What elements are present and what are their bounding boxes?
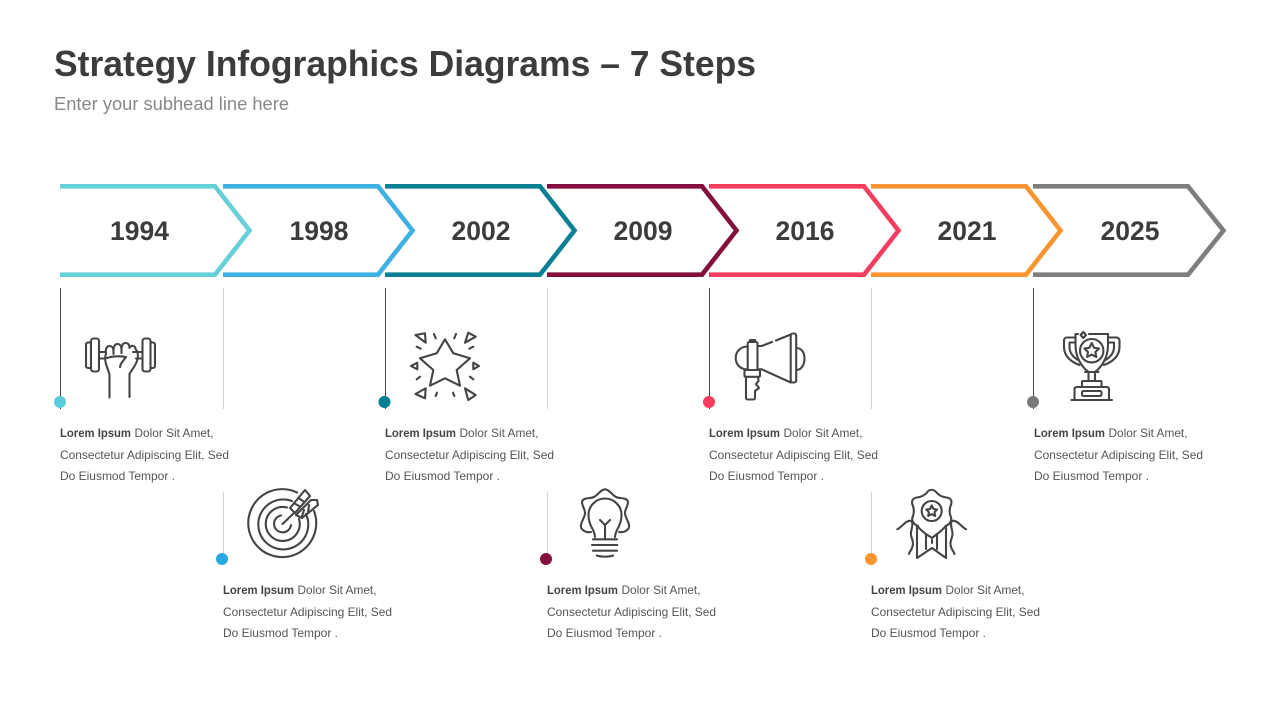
text block: step 3	[385, 426, 554, 483]
icon: trophy	[1064, 332, 1120, 400]
step 4 connector and dot	[540, 288, 552, 565]
icon: light bulb in gear	[581, 489, 629, 557]
text block: step 2: Dolor Sit Amet,	[298, 583, 376, 597]
arrow: 2021	[871, 186, 1060, 275]
arrow: 2016: 2016	[776, 216, 834, 246]
arrow: 1994: 1994	[110, 216, 169, 246]
arrow: 1998: 1998	[290, 216, 348, 246]
arrow: 2025: 2025	[1101, 216, 1159, 246]
step 3 connector and dot	[378, 288, 390, 409]
text block: step 7	[1034, 426, 1203, 483]
icon: megaphone	[736, 334, 804, 400]
text block: step 2	[223, 583, 392, 640]
text block: step 6: Lorem Ipsum	[871, 583, 942, 597]
arrow: 2002	[385, 186, 574, 275]
text block: step 1: Consectetur Adipiscing Elit, Sed	[60, 448, 229, 462]
step 7 connector and dot	[1027, 288, 1039, 409]
text block: step 4: Lorem Ipsum	[547, 583, 618, 597]
text block: step 7: Dolor Sit Amet,	[1108, 426, 1188, 440]
text block: step 6: Dolor Sit Amet,	[946, 583, 1024, 597]
text block: step 1	[60, 426, 229, 483]
text block: step 4: Consectetur Adipiscing Elit, Sed	[547, 605, 716, 619]
title: Strategy Infographics Diagrams – 7 Steps	[54, 43, 756, 84]
text block: step 3: Lorem Ipsum	[385, 426, 456, 440]
text block: step 1: Lorem Ipsum	[60, 426, 131, 440]
text block: step 3: Consectetur Adipiscing Elit, Sed	[385, 448, 554, 462]
step 1 connector and dot	[54, 288, 66, 409]
text block: step 4: Do Eiusmod Tempor .	[547, 626, 662, 640]
icon: dumbbell and fist	[86, 338, 155, 398]
arrow: 2021: 2021	[938, 216, 996, 246]
arrow: 1994	[60, 186, 250, 275]
text block: step 4	[547, 583, 716, 640]
subtitle: Enter your subhead line here	[54, 94, 289, 114]
text block: step 2: Lorem Ipsum	[223, 583, 294, 597]
text block: step 5: Consectetur Adipiscing Elit, Sed	[709, 448, 878, 462]
icon: ribbon badge	[897, 490, 966, 558]
text block: step 5: Dolor Sit Amet,	[784, 426, 862, 440]
arrow: 2009	[547, 186, 736, 275]
step 2 connector and dot	[216, 288, 228, 565]
text block: step 7: Lorem Ipsum	[1034, 426, 1105, 440]
text block: step 1: Dolor Sit Amet,	[134, 426, 214, 440]
text block: step 6: Consectetur Adipiscing Elit, Sed	[871, 605, 1040, 619]
arrow: 2016	[709, 186, 898, 275]
step 6 connector and dot	[865, 288, 877, 565]
text block: step 5	[709, 426, 878, 483]
text block: step 5: Do Eiusmod Tempor .	[709, 469, 824, 483]
text block: step 7: Consectetur Adipiscing Elit, Sed	[1034, 448, 1203, 462]
icon: target with arrow	[248, 489, 318, 557]
arrow: 1998	[223, 186, 412, 275]
text block: step 6	[871, 583, 1040, 640]
step 5 connector and dot	[703, 288, 715, 409]
text block: step 7: Do Eiusmod Tempor .	[1034, 469, 1149, 483]
text block: step 1: Do Eiusmod Tempor .	[60, 469, 175, 483]
arrow: 2025	[1033, 186, 1224, 275]
icon: star burst	[411, 333, 479, 400]
arrow: 2009: 2009	[614, 216, 672, 246]
text block: step 3: Do Eiusmod Tempor .	[385, 469, 500, 483]
text block: step 5: Lorem Ipsum	[709, 426, 780, 440]
text block: step 6: Do Eiusmod Tempor .	[871, 626, 986, 640]
text block: step 4: Dolor Sit Amet,	[622, 583, 700, 597]
text block: step 3: Dolor Sit Amet,	[460, 426, 538, 440]
text block: step 2: Consectetur Adipiscing Elit, Sed	[223, 605, 392, 619]
text block: step 2: Do Eiusmod Tempor .	[223, 626, 338, 640]
arrow: 2002: 2002	[452, 216, 510, 246]
